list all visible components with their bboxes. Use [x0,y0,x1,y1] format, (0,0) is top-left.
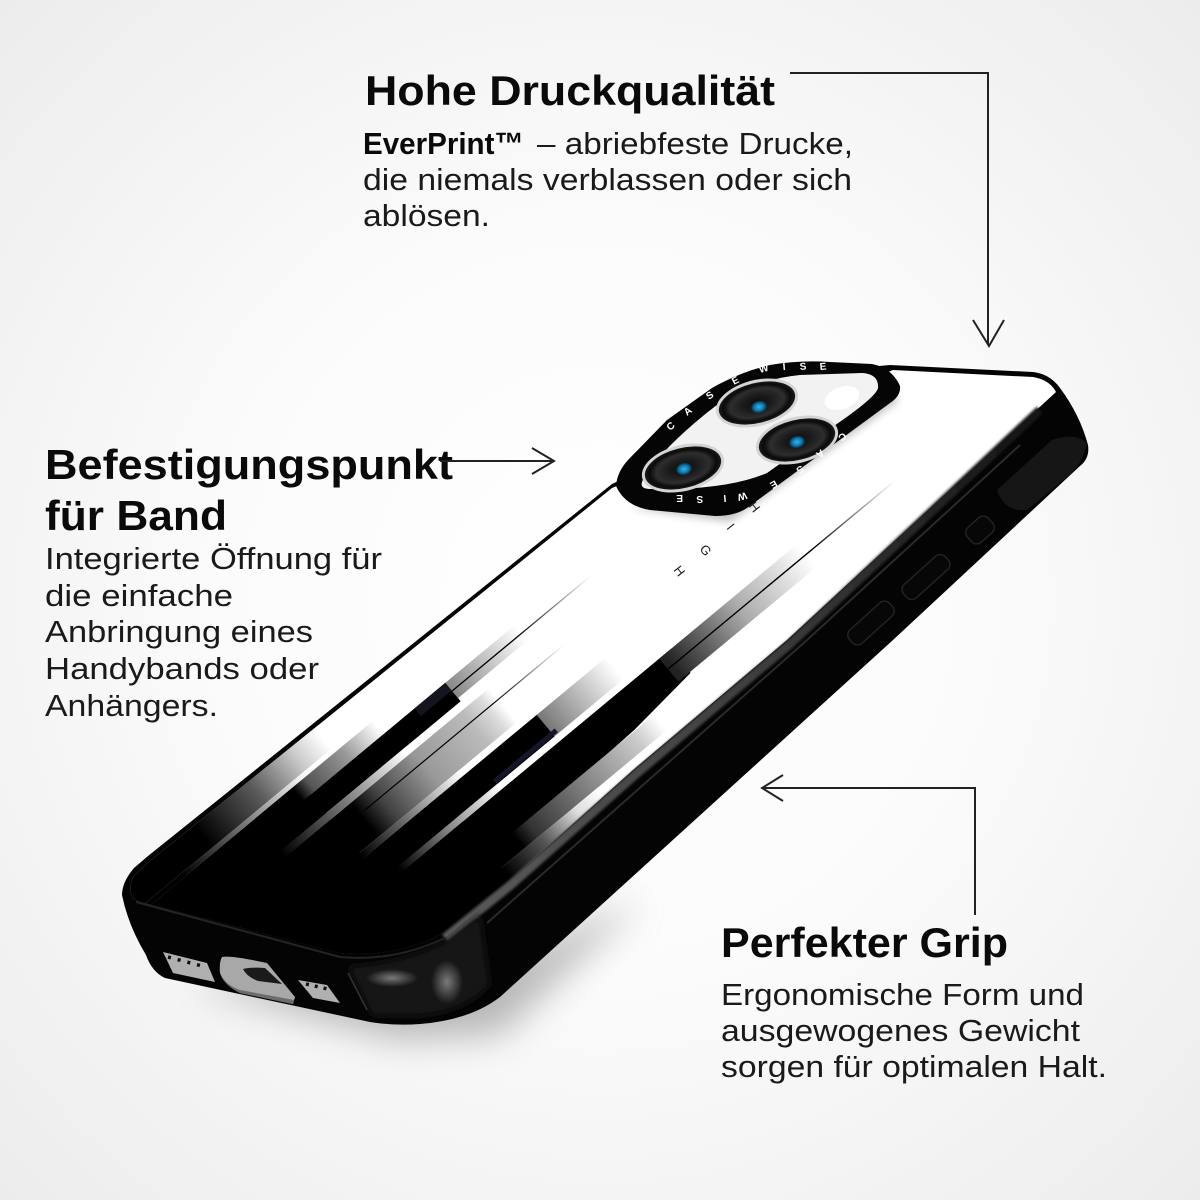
body: strap attachment: Anhängers. [45,688,218,723]
body: strap attachment: Integrierte Öffnung für [45,541,382,576]
phone case illustration [122,361,1088,1025]
highlight right [432,962,462,1002]
camera island [616,361,900,516]
flash [821,382,863,414]
left speaker [163,952,215,982]
arrow: strap attachment [440,448,554,474]
port slot [243,968,282,984]
phone drop shadow [190,900,640,1040]
stripe artwork [130,483,892,954]
body: strap attachment: Handybands oder [45,651,319,686]
volume down [845,598,897,648]
side seam line [487,445,1020,923]
glossy rim band along long edge [445,410,1040,938]
body: grip: ausgewogenes Gewicht [721,1013,1080,1048]
inner rim line bottom [136,902,445,958]
right speaker [298,980,340,1003]
body: grip: Ergonomische Form und [721,977,1084,1012]
body: strap attachment: Anbringung eines [45,614,313,649]
body: print quality: – abriebfeste Drucke, [537,126,853,161]
highlight left [368,970,416,986]
heading: strap attachment: Befestigungspunkt [45,441,453,488]
corner seam [348,973,367,1010]
volume up [899,552,953,602]
heading: strap attachment: für Band [45,492,227,539]
camera opening [642,373,878,489]
camera island shadow [630,390,900,522]
case print wordmark: HIGH [671,499,763,579]
fine lines [444,578,588,696]
heading: strap attachment [45,441,453,539]
lens top [711,371,803,435]
heading: grip: Perfekter Grip [721,919,1008,966]
action button [963,513,997,547]
body: strap attachment [45,541,382,723]
body: print quality [363,126,853,233]
top corner side patch [997,437,1087,510]
callout: print quality [363,67,853,233]
side buttons [845,513,997,648]
bottom corner gleam [348,915,490,1016]
heading: print quality: Hohe Druckqualität [365,67,775,114]
body: print quality: EverPrint™ [363,126,524,161]
port underside [221,975,294,1004]
speaker holes left [168,957,202,966]
white printed back with stripes [130,370,1056,954]
case silhouette [122,365,1088,1025]
body: grip [721,977,1107,1084]
body: print quality: die niemals verblassen oder sich [363,162,852,197]
body: print quality: ablösen. [363,198,490,233]
body: grip: sorgen für optimalen Halt. [721,1049,1107,1084]
island lettering upper: CASEWISE [665,361,827,433]
island lettering lower: CASEWISE [676,430,848,504]
lens left [637,436,729,500]
body: strap attachment: die einfache [45,578,233,613]
lens right [751,408,843,472]
arrow: grip [762,775,975,915]
charging port [220,957,295,1004]
callout: grip [721,919,1107,1084]
speaker holes right [306,984,332,990]
arrow: print quality [790,73,1004,346]
callout: strap attachment [45,441,453,723]
